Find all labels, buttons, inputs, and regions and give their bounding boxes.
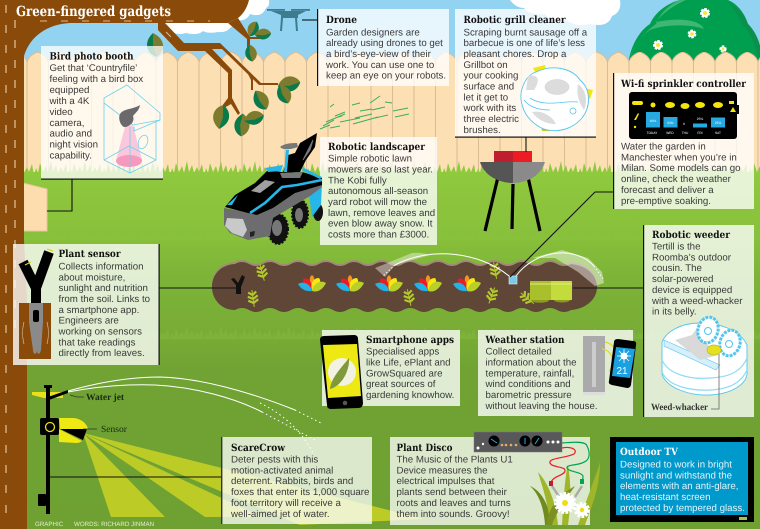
panel: scarecrow bbox=[221, 437, 372, 524]
panel: wi-fi sprinkler controller bbox=[613, 73, 754, 209]
tree trunk and top branch bbox=[0, 0, 278, 529]
body text: sunlight and nutrition bbox=[58, 283, 148, 294]
fence bbox=[6, 52, 760, 177]
body text: Tertill is the bbox=[652, 242, 700, 252]
body text: wind conditions and bbox=[484, 379, 571, 390]
panel: bird photo booth bbox=[41, 46, 163, 180]
lawn bbox=[0, 172, 760, 529]
body text: Designed to work in bright bbox=[620, 460, 732, 470]
body text: keep an eye on your robots. bbox=[326, 70, 446, 82]
body text: your cooking bbox=[464, 70, 518, 82]
panel: robotic landscaper bbox=[320, 137, 437, 245]
controller screen: 25% bbox=[715, 121, 721, 125]
body text: well-aimed jet of water. bbox=[230, 509, 330, 520]
controller screen: TODAY bbox=[647, 131, 658, 135]
body text: Deter pests with this bbox=[231, 454, 318, 466]
icon: daisies bbox=[556, 494, 588, 516]
panel: weather station bbox=[478, 330, 636, 416]
credits: GRAPHIC bbox=[35, 521, 63, 528]
body text: in its belly. bbox=[652, 306, 697, 318]
icon: weather station and phone: 21 bbox=[616, 366, 628, 377]
body text: The Kobi fully bbox=[328, 176, 387, 186]
heading: Robotic grill cleaner bbox=[464, 15, 566, 26]
icon: phone bbox=[320, 335, 363, 409]
label: sensor: Sensor bbox=[101, 425, 128, 435]
wheels bbox=[268, 200, 323, 244]
body text: pleasant chores. Drop a bbox=[464, 49, 567, 60]
body text: working on sensors bbox=[58, 326, 142, 338]
body text: autonomous all-season bbox=[328, 186, 428, 197]
heading: Plant sensor bbox=[58, 249, 121, 260]
body text: deterrent. Rabbits, birds and bbox=[231, 476, 353, 487]
body text: Roomba’s outdoor bbox=[652, 252, 732, 264]
mini plant sensor bbox=[231, 275, 245, 294]
icon: robotic mower bbox=[224, 133, 323, 244]
body text: device is equipped bbox=[652, 285, 732, 296]
body text: cousin. The bbox=[652, 263, 702, 274]
body text: surface and bbox=[464, 82, 514, 92]
panel: outdoor TV bbox=[610, 437, 754, 522]
body text: Engineers are bbox=[58, 316, 119, 326]
panel: drone bbox=[317, 9, 449, 86]
body text: GrowSquared are bbox=[366, 368, 442, 380]
body text: with a 4K bbox=[48, 96, 90, 107]
body text: gardening knowhow. bbox=[366, 390, 454, 401]
body text: mowers are so last year. bbox=[328, 164, 433, 176]
icon: music device bbox=[474, 432, 562, 452]
body text: Water the garden in bbox=[621, 142, 706, 152]
heading: Robotic landscaper bbox=[328, 142, 426, 153]
bird box on trunk bbox=[23, 183, 47, 231]
grass blades bbox=[530, 462, 600, 525]
grass tufts bbox=[24, 160, 760, 339]
body text: Simple robotic lawn bbox=[328, 154, 412, 164]
controller screen bbox=[629, 92, 739, 139]
body text: Grillbot on bbox=[464, 60, 508, 71]
body text: even blow away snow. It bbox=[328, 218, 433, 230]
heading: Smartphone apps bbox=[366, 335, 454, 346]
heading: Bird photo booth bbox=[50, 52, 134, 62]
body text: Device measures the bbox=[396, 466, 488, 476]
panel: smartphone apps bbox=[320, 330, 460, 409]
body text: camera, bbox=[50, 118, 84, 129]
ferns bbox=[247, 261, 537, 308]
body text: night vision bbox=[50, 140, 98, 150]
controller screen: 25% bbox=[697, 117, 703, 121]
body text: Specialised apps bbox=[366, 346, 439, 358]
sky bbox=[0, 0, 760, 180]
icon: drone bbox=[267, 9, 310, 31]
icon: scarecrow sprinkler bbox=[32, 385, 97, 514]
body text: video bbox=[50, 107, 73, 118]
controller screen: THU bbox=[682, 131, 689, 135]
body text: directly from leaves. bbox=[58, 348, 145, 359]
body text: plants send between their bbox=[396, 487, 508, 498]
body text: sunlight and withstand the bbox=[620, 470, 732, 482]
grill bbox=[480, 151, 545, 231]
body text: barbecue is one of life’s less bbox=[464, 38, 585, 49]
body text: costs more than £3000. bbox=[328, 230, 429, 240]
body text: audio and bbox=[50, 128, 92, 140]
credits: WORDS: RICHARD JINMAN bbox=[74, 521, 154, 528]
body text: barometric pressure bbox=[486, 390, 572, 401]
body text: great sources of bbox=[366, 379, 436, 390]
body text: pre-emptive soaking. bbox=[621, 196, 711, 207]
body text: work. You can use one to bbox=[325, 60, 434, 71]
sprinkler spray bbox=[375, 250, 604, 286]
body text: heat-resistant screen bbox=[620, 492, 710, 503]
heading: Outdoor TV bbox=[620, 447, 678, 458]
heading: Weather station bbox=[485, 335, 565, 346]
body text: motion-activated animal bbox=[231, 466, 333, 476]
body text: Milan. Some models can go bbox=[621, 163, 741, 174]
body text: a bird’s-eye-view of their bbox=[326, 49, 432, 60]
heading: Wi-fi sprinkler controller bbox=[620, 79, 747, 90]
flower bed bbox=[212, 250, 604, 312]
icon: grillbot bbox=[521, 65, 593, 131]
heading: Drone bbox=[326, 15, 357, 26]
leaves bbox=[145, 19, 302, 137]
body text: about moisture, bbox=[58, 272, 125, 284]
label: weed-whacker: Weed-whacker bbox=[651, 403, 709, 413]
water jet arcs bbox=[68, 377, 321, 453]
body text: feeling with a bird box bbox=[50, 74, 143, 85]
body text: equipped bbox=[50, 85, 89, 96]
connector lines bbox=[47, 20, 643, 477]
icon: soil and probe bbox=[19, 249, 53, 359]
body text: capability. bbox=[50, 150, 92, 162]
controller screen: FRI bbox=[697, 131, 703, 135]
body text: three electric bbox=[464, 114, 519, 125]
body text: them into sounds. Groovy! bbox=[396, 509, 510, 520]
body text: electrical impulses that bbox=[396, 476, 495, 487]
body text: yard robot will mow the bbox=[328, 197, 427, 208]
controller screen: 0 bbox=[683, 122, 685, 126]
flowers bbox=[298, 275, 481, 292]
body text: let it get to bbox=[464, 92, 508, 104]
body text: work with its bbox=[462, 103, 516, 114]
panel: robotic grill cleaner bbox=[455, 9, 596, 138]
heading: Plant Disco bbox=[396, 443, 453, 454]
body text: Garden designers are bbox=[326, 28, 420, 38]
body text: from the soil. Links to bbox=[58, 294, 150, 305]
body text: foxes that enter its 1,000 square bbox=[231, 487, 369, 498]
body text: roots and leaves and turns bbox=[396, 498, 511, 509]
body text: lawn, remove leaves and bbox=[328, 208, 435, 219]
body text: elements with an anti-glare, bbox=[620, 481, 738, 492]
controller screen: 60% bbox=[650, 119, 656, 123]
sprinkler head bbox=[509, 276, 517, 284]
body text: already using drones to get bbox=[326, 38, 443, 49]
body text: The Music of the Plants U1 bbox=[396, 454, 513, 466]
tree: flowering shrub bbox=[628, 0, 760, 180]
label: water jet: Water jet bbox=[86, 393, 125, 403]
body text: without leaving the house. bbox=[484, 401, 598, 412]
body text: temperature, rainfall, bbox=[486, 368, 574, 380]
panel: plant disco bbox=[390, 432, 600, 525]
robot box in bed bbox=[530, 281, 572, 303]
body text: Collects information bbox=[58, 262, 144, 272]
body text: forecast and deliver a bbox=[621, 185, 714, 196]
heading: Robotic weeder bbox=[652, 230, 731, 241]
body text: protected by tempered glass. bbox=[620, 503, 745, 514]
icon: tertill robot bbox=[662, 315, 747, 409]
scarecrow beams bbox=[83, 433, 424, 525]
icon: bird box bbox=[104, 85, 160, 173]
controller screen: 63% bbox=[667, 121, 674, 125]
body text: a smartphone app. bbox=[58, 305, 139, 316]
body text: foot territory will receive a bbox=[231, 498, 341, 509]
icon: wires bbox=[549, 442, 589, 498]
spray from mower bbox=[320, 96, 409, 129]
body text: Manchester when you’re in bbox=[621, 152, 737, 164]
controller screen: WED bbox=[666, 131, 674, 135]
body text: online, check the weather bbox=[621, 174, 732, 185]
body text: Collect detailed bbox=[486, 346, 552, 358]
body text: information about the bbox=[486, 358, 577, 368]
panel: robotic weeder bbox=[643, 225, 754, 417]
heading: ScareCrow bbox=[231, 443, 285, 454]
body text: like Life, ePlant and bbox=[366, 358, 451, 368]
body text: with a weed-whacker bbox=[651, 296, 743, 307]
clouds bbox=[160, 0, 620, 34]
body text: Scraping burnt sausage off a bbox=[464, 28, 588, 38]
body text: solar-powered bbox=[652, 274, 713, 285]
icon: weather station and phone bbox=[583, 336, 636, 395]
body text: brushes. bbox=[464, 125, 501, 136]
body text: that take readings bbox=[58, 338, 136, 348]
title: Green-fingered gadgets bbox=[16, 4, 171, 20]
controller screen: SAT bbox=[715, 131, 721, 135]
body text: Get that ‘Countryfile’ bbox=[50, 63, 137, 74]
panel: plant sensor bbox=[13, 244, 160, 365]
